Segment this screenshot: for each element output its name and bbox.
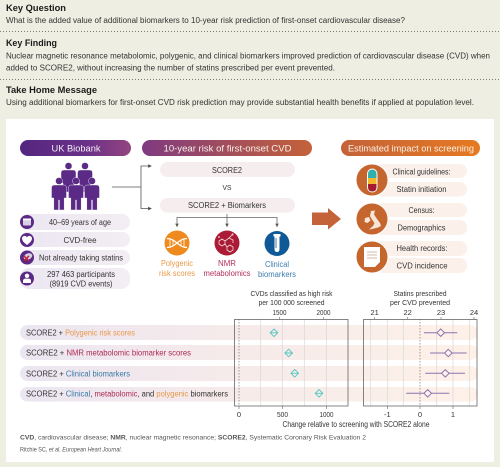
tree arrows: biomarker types [176, 214, 278, 226]
chart: statins prescribed: 24 [470, 308, 478, 317]
bracket arrow: cohort to models [112, 165, 151, 210]
icon: group of people [52, 162, 100, 210]
icon: DNA [164, 230, 190, 256]
box: SCORE2 + Biomarkers [160, 198, 295, 212]
header pill: UK Biobank: UK Biobank [52, 144, 101, 154]
chart title: per CVD prevented [390, 298, 450, 307]
biomarker: NMR: metabolomics [204, 269, 250, 278]
icon: test tube [264, 231, 290, 256]
text: key finding body line two: added to SCORE2, without increasing the number of statins prescribed per event prevented. [6, 64, 335, 72]
impact: clinical guidelines: Clinical guidelines: [392, 168, 450, 176]
chart: statins prescribed: 21 [371, 308, 379, 317]
impact: census [356, 203, 467, 235]
biomarker: polygenic [159, 230, 195, 278]
impact: clinical guidelines: Statin initiation [396, 185, 446, 194]
criterion: CVD-free [20, 232, 130, 247]
biomarker: polygenic: risk scores [159, 269, 195, 278]
data markers [270, 329, 323, 397]
axis label: Change relative to screening with SCORE2 alone [282, 420, 430, 429]
criterion: no statins [20, 250, 130, 265]
criterion: participants [20, 268, 130, 289]
icon: molecule [214, 230, 240, 256]
header pill: 10-year risk [142, 140, 312, 156]
row label: polygenic: SCORE2 + Polygenic risk scores [26, 328, 135, 338]
impact: health records: Health records: [396, 244, 448, 253]
biomarker: polygenic: Polygenic [161, 259, 193, 268]
impact: health records: CVD incidence [396, 262, 448, 270]
biomarker: clinical: Clinical [265, 260, 289, 269]
chart: statins prescribed: 23 [437, 308, 445, 317]
icon: document [356, 241, 388, 273]
data markers [406, 329, 467, 397]
chart: statins prescribed: 22 [404, 308, 412, 317]
header pill: estimated impact: Estimated impact on screening [348, 144, 474, 154]
impact: census: Demographics [398, 224, 446, 232]
chart: statins prescribed [364, 289, 478, 419]
icon: capsule [356, 164, 388, 196]
footnote: abbreviations: CVD, cardiovascular disease; NMR, nuclear magnetic resonance; SCORE2 , Systematic Coronary Risk Evaluation 2 [20, 434, 367, 442]
comparison rows [20, 325, 478, 402]
text: key question body: What is the added value of additional biomarkers to 10-year risk prediction of first-onset cardiovascular disease? [6, 16, 406, 25]
impact: census: Census: [408, 206, 434, 215]
text: take home body: Using additional biomarkers for first-onset CVD risk prediction may provide substantial health benefits if applied at population level. [6, 98, 474, 107]
box: SCORE2 + Biomarkers: SCORE2 + Biomarkers [188, 201, 266, 210]
icon: calendar [20, 215, 34, 229]
header pill: UK Biobank [20, 140, 131, 156]
chart title: CVDs classified as high risk [250, 289, 333, 298]
chart: CVDs classified as high risk: 1000 [320, 410, 334, 419]
arrow: models to impact [312, 208, 341, 230]
criterion: age [20, 214, 130, 230]
box: SCORE2: SCORE2 [212, 166, 242, 175]
chart: statins prescribed: 0 [418, 410, 422, 419]
chart title: Statins prescribed [394, 289, 446, 298]
chart: CVDs classified as high risk: 2000 [316, 308, 330, 317]
panel: key finding [6, 38, 490, 72]
text: key finding body line one: Nuclear magnetic resonance metabolomic, polygenic, and clinical biomarkers improved prediction of cardiovascular disease (CVD) when [6, 52, 490, 60]
chart: CVDs classified as high risk [234, 289, 348, 419]
header pill: estimated impact [341, 140, 480, 156]
criterion: age: 40–69 years of age [49, 218, 111, 227]
biomarker: clinical: biomarkers [258, 270, 296, 279]
chart: statins prescribed: 1 [451, 410, 455, 419]
icon: crossed pill [20, 250, 34, 264]
heading: key question: Key Question [6, 3, 66, 13]
criterion: participants: 297 463 participants [47, 270, 115, 279]
footnote: citation: Ritchie SC, et al. European Heart Journal. [20, 446, 122, 454]
chart title: per 100 000 screened [258, 298, 324, 307]
row label: clinical: SCORE2 + Clinical biomarkers [26, 370, 130, 378]
impact: clinical guidelines [356, 164, 467, 196]
icon: person [20, 272, 34, 286]
panel: graphical abstract [6, 119, 494, 462]
text: VS: VS [222, 183, 232, 192]
icon: UK map [356, 203, 388, 235]
chart title [390, 289, 450, 307]
icon: heart [20, 233, 34, 247]
row label: combined: SCORE2 + Clinical, metabolomic, and polygenic biomarkers [26, 390, 228, 398]
chart: CVDs classified as high risk: 500 [277, 410, 288, 419]
heading: take home message: Take Home Message [6, 85, 97, 95]
biomarker: NMR: NMR [218, 259, 236, 268]
chart: statins prescribed: -1 [384, 410, 391, 419]
box: SCORE2 [160, 162, 295, 177]
criterion: no statins: Not already taking statins [39, 254, 123, 262]
chart: CVDs classified as high risk: 0 [237, 410, 241, 419]
criterion: participants: (8919 CVD events) [50, 280, 113, 288]
biomarker: clinical [258, 231, 296, 279]
row label: NMR: SCORE2 + NMR metabolomic biomarker scores [26, 348, 191, 358]
biomarker: NMR [204, 230, 250, 278]
chart title [250, 289, 333, 307]
criterion: CVD-free: CVD-free [64, 236, 96, 245]
panel: take home message [6, 85, 474, 107]
chart: CVDs classified as high risk: 1500 [272, 308, 286, 317]
heading: key finding: Key Finding [6, 38, 57, 48]
header pill: 10-year risk: 10-year risk of first-onset CVD [164, 144, 292, 154]
panel: key question [6, 3, 406, 25]
impact: health records [356, 241, 467, 273]
